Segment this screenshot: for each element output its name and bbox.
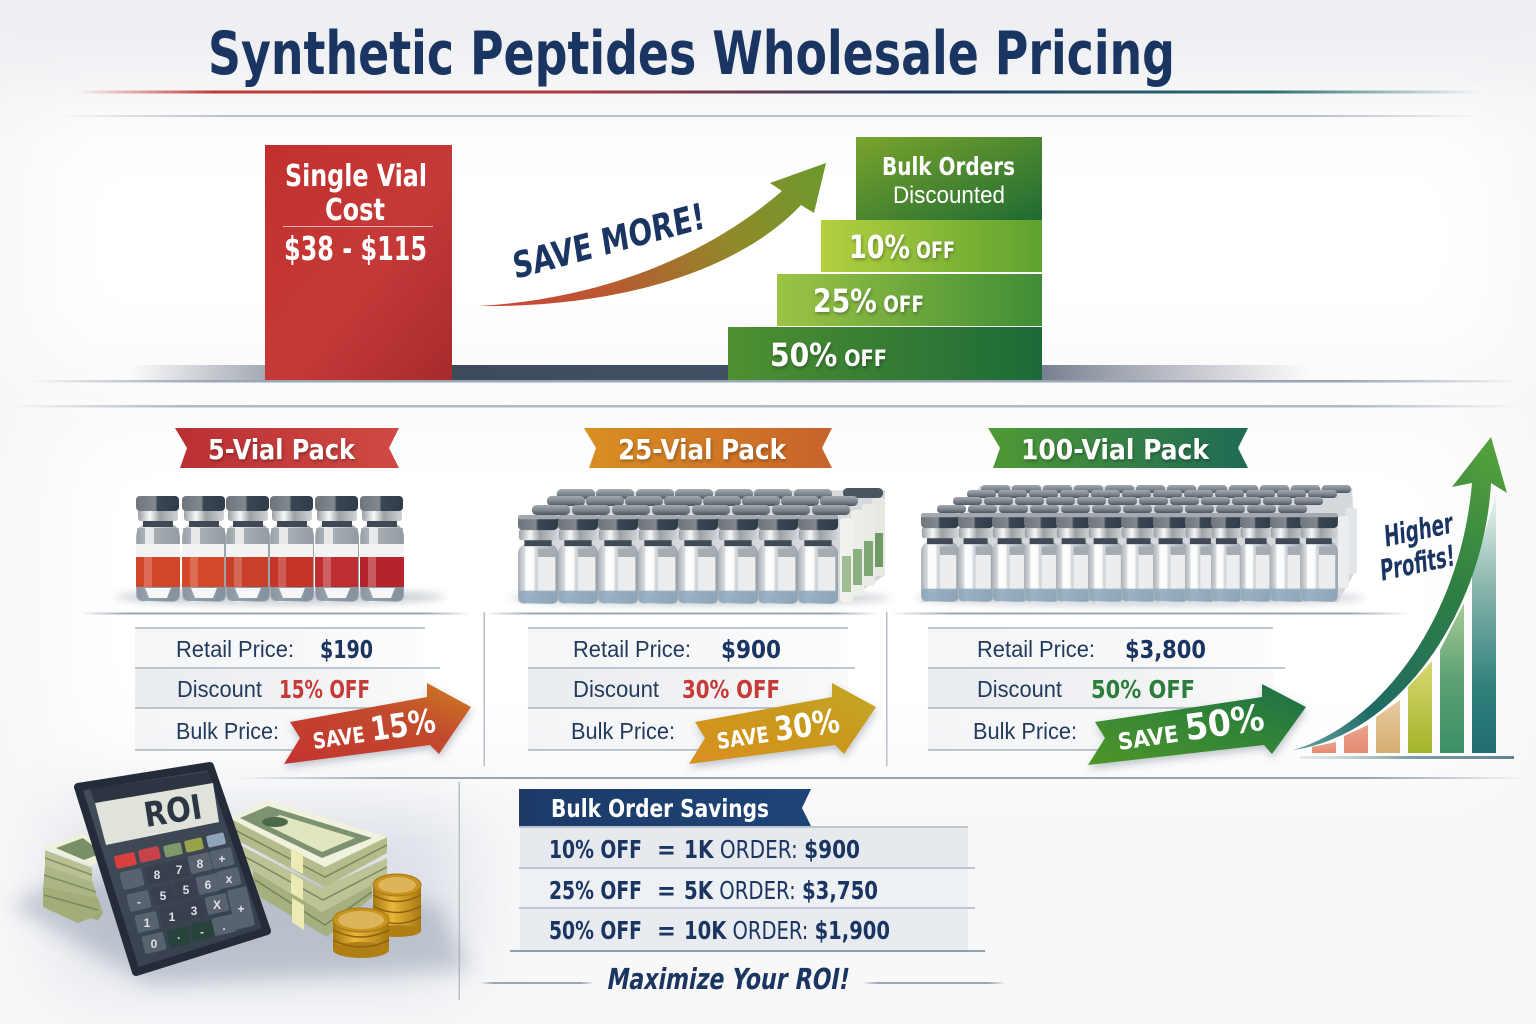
ribbon: 100-vial pack: 100-Vial Pack xyxy=(1021,433,1210,466)
icon: coin stacks xyxy=(333,874,421,958)
table: 25-vial pack pricing: $900 xyxy=(721,635,781,664)
arrow: save 15% xyxy=(284,683,471,764)
table: 100-vial pack pricing: Retail Price: xyxy=(977,636,1095,662)
arrow: save 15%: SAVE 15% xyxy=(310,701,438,757)
ribbon: 25-vial pack: 25-Vial Pack xyxy=(618,433,787,466)
icon: calculator: 3 xyxy=(191,904,198,918)
table: 25-vial pack pricing: Bulk Price: xyxy=(571,718,675,744)
table: 5-vial pack pricing: Retail Price: xyxy=(176,636,294,662)
step: 25% off: 25% OFF xyxy=(813,282,924,320)
icon: right cash stack xyxy=(229,800,387,937)
row: 10% off: = xyxy=(657,835,676,864)
title: Synthetic Peptides Wholesale Pricing xyxy=(208,19,1175,89)
arrow: save 30%: SAVE 30% xyxy=(714,701,842,757)
table: 25-vial pack pricing: Discount xyxy=(573,676,660,702)
ribbon: 25-vial pack xyxy=(584,428,832,468)
icon: calculator: 5 xyxy=(160,889,167,903)
row: 25% off xyxy=(549,876,878,905)
icon: calculator xyxy=(78,766,267,972)
row: 10% off xyxy=(549,835,860,864)
table: 25-vial pack pricing: 30% OFF xyxy=(682,675,780,704)
shelf under top section xyxy=(10,365,1520,408)
image: 25 vials xyxy=(510,488,890,606)
table: 25-vial pack pricing xyxy=(528,628,855,750)
icon: calculator: 7 xyxy=(176,863,183,877)
banner: bulk order savings xyxy=(519,789,811,826)
step: bulk orders discounted: Bulk Orders xyxy=(882,152,1015,181)
row: 25% off: 25% OFF xyxy=(549,876,642,905)
banner: bulk order savings: Bulk Order Savings xyxy=(551,794,769,823)
icon: calculator: 1 xyxy=(144,916,151,930)
icon: calculator: - xyxy=(137,895,141,909)
image: 100 vials xyxy=(915,485,1365,606)
icon: calculator: 6 xyxy=(205,878,212,892)
step: 25% off xyxy=(777,274,1042,326)
icon: calculator: 8 xyxy=(197,857,204,871)
price range: $38 - $115 xyxy=(284,229,427,268)
table: 25-vial pack pricing: Retail Price: xyxy=(573,636,691,662)
icon: calculator: · xyxy=(177,931,181,945)
icon: calculator: X xyxy=(213,898,221,912)
icon: calculator: + xyxy=(218,852,226,866)
row: 50% off: 50% OFF xyxy=(549,916,642,945)
step: 10% off xyxy=(821,220,1042,272)
icon: calculator: . xyxy=(222,919,226,933)
illustration: calculator, cash and coins xyxy=(10,766,470,985)
label: higher profits xyxy=(1379,505,1456,588)
arrow: save 30% xyxy=(689,683,876,764)
table: 100-vial pack pricing xyxy=(928,628,1285,750)
row: 10% off: 10% OFF xyxy=(549,835,642,864)
ribbon: 5-vial pack: 5-Vial Pack xyxy=(208,433,356,466)
heading second line: Cost xyxy=(325,193,385,228)
icon: calculator: + xyxy=(237,902,245,916)
panel: bulk order savings xyxy=(510,789,985,951)
row: 50% off: 10K ORDER: $1,900 xyxy=(684,916,890,945)
image: 5 vials xyxy=(115,496,445,605)
icon: calculator: 0 xyxy=(151,937,158,951)
arrow: profit growth xyxy=(1293,437,1507,750)
table: 5-vial pack pricing: 15% OFF xyxy=(279,675,370,704)
label: higher profits: Higher xyxy=(1383,505,1454,554)
arrow: save more xyxy=(478,163,826,306)
icon: calculator: - xyxy=(200,925,204,939)
row: 10% off: 1K ORDER: $900 xyxy=(684,835,860,864)
callout: maximize your roi: Maximize Your ROI! xyxy=(605,962,853,996)
icon: calculator: 5 xyxy=(183,883,190,897)
ribbon: 100-vial pack xyxy=(988,428,1248,468)
arrow: save 50%: SAVE 50% xyxy=(1115,698,1267,759)
table: 5-vial pack pricing: $190 xyxy=(320,635,373,664)
table: 100-vial pack pricing: 50% OFF xyxy=(1091,675,1195,704)
label: save more: SAVE MORE! xyxy=(510,195,708,288)
panel: bulk discount steps xyxy=(728,137,1042,380)
calculator screen xyxy=(95,783,219,845)
row: 25% off: 5K ORDER: $3,750 xyxy=(684,876,878,905)
table: 5-vial pack pricing: Discount xyxy=(177,676,263,702)
step: 50% off xyxy=(728,327,1042,380)
arrow: save 50% xyxy=(1088,684,1306,765)
chart: higher profits bars xyxy=(1300,495,1514,759)
calculator screen: ROI xyxy=(141,787,205,836)
icon: calculator: 8 xyxy=(154,868,161,882)
icon: calculator: 1 xyxy=(169,910,176,924)
table: 5-vial pack pricing: Bulk Price: xyxy=(176,718,279,744)
table: 100-vial pack pricing: Discount xyxy=(977,676,1063,702)
step: bulk orders discounted: Discounted xyxy=(893,182,1005,209)
panel: single vial cost xyxy=(265,145,452,380)
row: 50% off xyxy=(549,916,890,945)
step: 50% off: 50% OFF xyxy=(770,336,887,374)
step: bulk orders discounted xyxy=(856,137,1042,220)
heading: single vial cost: Single Vial xyxy=(285,159,427,194)
label: higher profits: Profits! xyxy=(1379,538,1456,588)
table: 5-vial pack pricing xyxy=(135,628,440,750)
icon: calculator: x xyxy=(226,872,233,886)
dividers xyxy=(236,612,1526,1000)
ribbon: 5-vial pack xyxy=(175,428,399,468)
row: 50% off: = xyxy=(657,916,676,945)
table: 100-vial pack pricing: $3,800 xyxy=(1125,635,1206,664)
step: 10% off: 10% OFF xyxy=(849,228,955,266)
table: 100-vial pack pricing: Bulk Price: xyxy=(973,718,1077,744)
icon: left cash stack xyxy=(43,833,112,923)
row: 25% off: = xyxy=(657,876,676,905)
